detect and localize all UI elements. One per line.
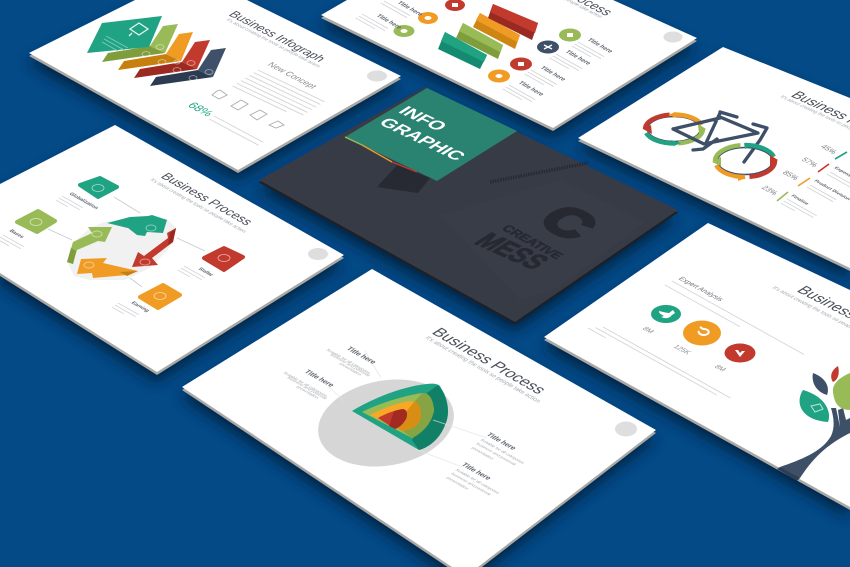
cover fold shape bbox=[377, 165, 430, 193]
label: title here 2: presentation bbox=[295, 385, 321, 400]
labels: Title here bbox=[516, 80, 546, 97]
cover banner bbox=[345, 88, 517, 181]
label: title here 4: business and personal bbox=[450, 472, 492, 496]
icon: bicycle bbox=[643, 112, 778, 181]
stat labels: 8M bbox=[712, 363, 729, 373]
icon: tablet bbox=[129, 23, 148, 36]
stat labels bbox=[640, 325, 729, 373]
leader lines bbox=[328, 351, 487, 467]
labels: Title here bbox=[395, 0, 425, 17]
label: title here 1: business and personal bbox=[329, 353, 371, 377]
icons row bbox=[212, 90, 284, 128]
logo: creative mess: MESS bbox=[467, 229, 556, 274]
labels: Title here bbox=[585, 37, 615, 54]
labels: Title here bbox=[374, 13, 404, 30]
social circles bbox=[651, 305, 756, 362]
legend labels: Finalize bbox=[789, 194, 810, 206]
logo: creative mess: C bbox=[526, 197, 610, 248]
label: title here 4: presentation bbox=[445, 476, 471, 491]
heading: business infograph: Business Infograph bbox=[225, 9, 329, 64]
paragraph lines bbox=[588, 281, 804, 403]
label: title here 1: presentation bbox=[338, 362, 364, 377]
badge bbox=[367, 70, 387, 82]
box labels bbox=[7, 192, 215, 313]
rounded icon boxes bbox=[17, 178, 243, 308]
legend labels bbox=[789, 166, 850, 206]
layered core chart bbox=[311, 369, 461, 477]
caption lines bbox=[209, 116, 263, 145]
label: title here 3: presentation bbox=[470, 446, 496, 461]
cycle background bbox=[68, 218, 176, 280]
icon circles bbox=[394, 0, 581, 82]
heading: new concept: New Concept bbox=[265, 61, 320, 90]
label: title here 2: business and personal bbox=[286, 376, 328, 400]
labels: Title here bbox=[563, 49, 593, 66]
percentages: 23% bbox=[759, 184, 780, 197]
label lines bbox=[356, 1, 604, 104]
box labels: Bases bbox=[7, 229, 25, 239]
subtitle: It's about creating the tools so people take action bbox=[148, 178, 247, 234]
badge bbox=[664, 32, 682, 42]
colour stripe bbox=[345, 137, 417, 172]
icon: tree bbox=[777, 366, 850, 481]
stat labels: 125K bbox=[671, 343, 694, 356]
label: title here 3: Title here bbox=[484, 431, 519, 451]
legend dashes bbox=[777, 152, 847, 201]
panel: process blocks slide bbox=[321, 0, 697, 131]
label: title here 1: Title here bbox=[344, 345, 379, 365]
labels: Title here bbox=[538, 65, 568, 82]
legend lines bbox=[781, 172, 850, 220]
label: title here 2: Suitable for all categories bbox=[282, 371, 329, 398]
banner title: GRAPHIC bbox=[375, 115, 471, 163]
percentages: 85% bbox=[780, 169, 801, 182]
stat: 68%: 68% bbox=[184, 100, 217, 119]
cover texture: page outline bbox=[440, 180, 645, 300]
label: title here 1: Suitable for all categories bbox=[325, 348, 372, 375]
paragraph lines bbox=[232, 70, 325, 118]
percentages bbox=[759, 143, 839, 197]
badge bbox=[308, 248, 328, 260]
label: title here 4: Title here bbox=[459, 461, 494, 481]
bicycle frame bbox=[673, 112, 767, 162]
label: title here 2: Title here bbox=[302, 368, 337, 388]
stacked 3D blocks bbox=[438, 4, 538, 69]
panel: business process cycle slide bbox=[0, 125, 344, 375]
rear wheel bbox=[643, 112, 706, 146]
heading: expert analysis: Expert Analysis bbox=[676, 275, 726, 303]
panel: business infograph slide bbox=[29, 0, 401, 173]
logo: creative mess bbox=[467, 197, 610, 274]
legend labels: Product Division bbox=[812, 179, 850, 201]
label: title here 3: business and personal bbox=[475, 442, 517, 466]
percentages: 45% bbox=[818, 143, 839, 156]
badge bbox=[615, 422, 637, 436]
front wheel bbox=[712, 143, 778, 181]
box label lines bbox=[0, 196, 205, 319]
box labels: Stellar bbox=[196, 267, 215, 278]
cover texture: pencil bbox=[490, 163, 588, 182]
stacked chevrons chart bbox=[87, 16, 226, 86]
logo: creative mess: CREATIVE bbox=[498, 222, 567, 261]
core layer: red bbox=[378, 409, 407, 429]
subtitle: It's about creating the tools so people take action bbox=[423, 335, 543, 404]
panel: bicycle slide bbox=[578, 47, 850, 271]
heading: Business Process bbox=[428, 326, 549, 397]
connectors bbox=[48, 197, 205, 287]
panel: expert analysis slide bbox=[544, 223, 850, 510]
core layer: orange bbox=[370, 401, 421, 431]
banner title: INFO bbox=[394, 103, 452, 134]
core layer: teal bbox=[352, 384, 448, 450]
labels bbox=[374, 0, 615, 97]
core layer: olive bbox=[362, 393, 434, 438]
panel: dark cover slide bbox=[259, 87, 678, 324]
stat labels: 8M bbox=[640, 325, 657, 335]
panel: layered core slide bbox=[182, 269, 656, 567]
box labels: Globalization bbox=[67, 192, 100, 210]
heading: Business Process bbox=[157, 170, 257, 227]
label: title here 3 bbox=[470, 431, 526, 466]
percentages: 57% bbox=[799, 156, 820, 169]
box labels: Earning bbox=[129, 301, 151, 313]
subtitle: It's about creating the tools so people take action bbox=[224, 18, 322, 69]
label: title here 4: Suitable for all categories bbox=[454, 468, 501, 495]
label: title here 4 bbox=[445, 461, 501, 496]
cycle arrows bbox=[67, 215, 176, 278]
label: title here 3: Suitable for all categories bbox=[479, 438, 526, 465]
